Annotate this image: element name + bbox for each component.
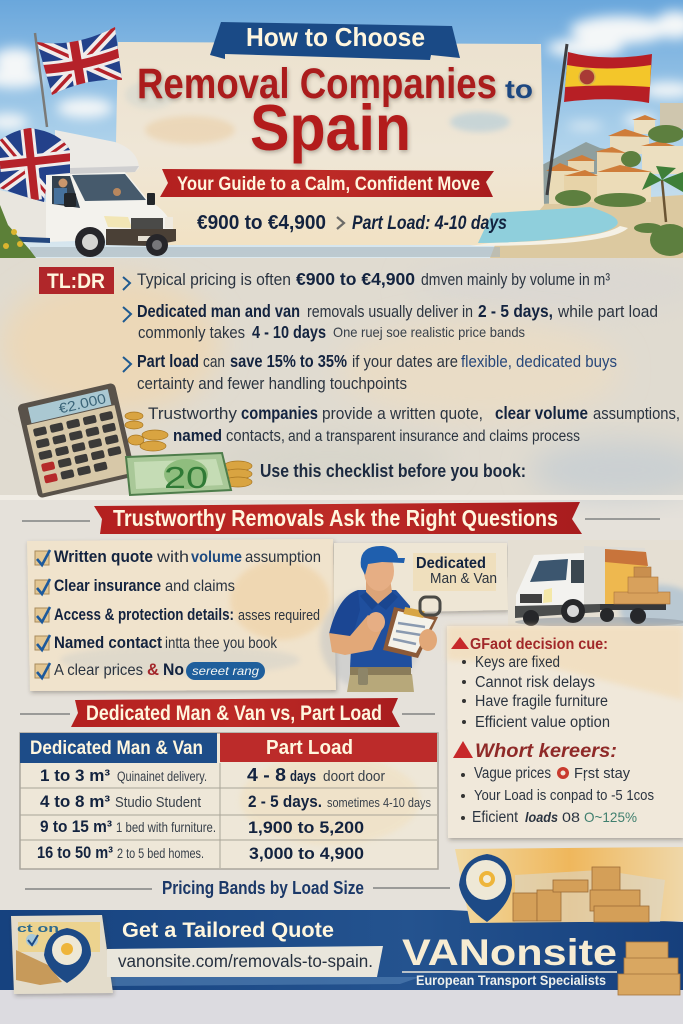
- table row 1: [40, 765, 385, 785]
- check item: written quote: with: [156, 549, 189, 566]
- panel: tl;dr: [39, 267, 680, 481]
- warning list: Eficient: [472, 809, 519, 826]
- illustration: calculator, coins and banknote: [17, 383, 252, 499]
- table header: dedicated: Dedicated Man & Van: [30, 737, 203, 759]
- table row 3: 9 to 15 m³: [40, 817, 112, 836]
- logo: vanonsite: VANonsite: [402, 932, 617, 973]
- table row 3: 1,900 to 5,200: [248, 818, 364, 837]
- fast decision cue list: Keys are fixed: [475, 654, 560, 671]
- section heading: trustworthy removals: [22, 502, 660, 534]
- main title: to: [505, 74, 533, 104]
- fast decision cue list: [451, 636, 610, 731]
- section heading: dedicated vs part load: Dedicated Man & Van vs, Part Load: [86, 702, 382, 725]
- table row 1: 1 to 3 m³: [40, 766, 110, 785]
- bullet: pricing: dmven mainly by volume in m³: [421, 271, 610, 289]
- bullet: delivery times: commonly takes: [138, 324, 245, 342]
- bullet: delivery times: while part load: [557, 303, 658, 321]
- table row 1: doort door: [323, 769, 385, 785]
- illustration: map pin and boxes: [455, 847, 683, 923]
- bullet: pricing: [123, 269, 610, 290]
- panel: decision cues: [447, 626, 683, 838]
- check item: written quote: volume: [191, 549, 242, 566]
- check item: written quote: Written quote: [54, 548, 153, 566]
- bullet: delivery times: Dedicated man and van: [137, 301, 300, 321]
- table header: dedicated: [20, 733, 217, 763]
- table row 2: Studio Student: [115, 795, 201, 811]
- parchment title panel: [114, 42, 544, 245]
- bullet: part load savings: [123, 351, 617, 393]
- footer band: [0, 910, 683, 990]
- main title: Spain: [250, 91, 411, 164]
- warning list: Vague prices: [474, 765, 551, 782]
- check item: written quote: assumption: [245, 549, 321, 566]
- table row 4: 3,000 to 4,900: [249, 844, 364, 863]
- table row 1: days: [290, 768, 316, 785]
- bullet: trustworthy companies: companies: [241, 403, 318, 423]
- bullet: trustworthy companies: clear volume: [495, 403, 588, 423]
- section heading: dedicated vs part load: [20, 698, 435, 727]
- table header: part load: Part Load: [266, 737, 353, 759]
- illustration: calculator, coins and banknote: €2.000: [57, 390, 108, 416]
- title banner: how to choose: How to Choose: [246, 22, 425, 52]
- bullet: part load savings: can: [203, 353, 225, 371]
- check item: access and protection: Access & protection details:: [54, 606, 234, 624]
- call to action: Get a Tailored Quote: [122, 919, 334, 942]
- fast decision cue list: Cannot risk delays: [475, 674, 595, 691]
- illustration: stacked boxes: [618, 942, 680, 995]
- illustration: removal man with clipboard: [320, 546, 440, 692]
- main title: Removal Companies: [137, 60, 497, 108]
- fast decision cue list: GFaot decision cue:: [470, 636, 608, 653]
- price and time summary: €900 to €4,900: [197, 212, 326, 234]
- check item: clear prices: sereet rang: [192, 664, 259, 678]
- warning list: Your Load is conpad to -5 1cos: [474, 787, 654, 804]
- illustration: calculator, coins and banknote: 20: [164, 460, 208, 495]
- check item: insurance: and claims: [165, 578, 235, 595]
- coast: sea, surf, palm and bushes: [470, 166, 683, 256]
- call to action: [107, 919, 383, 977]
- tl;dr badge: TL:DR: [47, 270, 105, 293]
- bullet: trustworthy companies: named: [173, 426, 222, 445]
- table row 2: 4 to 8 m³: [40, 792, 110, 811]
- heading: pricing bands: Pricing Bands by Load Size: [162, 877, 364, 898]
- warning list: Fŗst stay: [574, 766, 631, 782]
- subtitle red banner: [160, 169, 494, 197]
- bullet: part load savings: flexible, dedicated buys: [461, 353, 617, 371]
- bullet: trustworthy companies: Trustworthy: [148, 404, 237, 423]
- logo: vanonsite: European Transport Specialists: [416, 972, 606, 988]
- icon: uk flag on pole: [34, 27, 122, 128]
- warning list: 08: [562, 809, 580, 825]
- subtitle red banner: Your Guide to a Calm, Confident Move: [177, 173, 480, 195]
- check item: written quote: [35, 548, 321, 566]
- panel: dedicated man and van callout: Dedicated: [416, 555, 486, 572]
- check item: clear prices: No: [163, 661, 184, 679]
- check item: named contact: intta thee you book: [165, 635, 278, 652]
- illustration: map card with pin: [11, 915, 113, 994]
- check item: clear prices: &: [147, 661, 159, 679]
- section heading: trustworthy removals: Trustworthy Removals Ask the Right Questions: [113, 505, 558, 531]
- fast decision cue list: Efficient value option: [475, 714, 610, 731]
- bullet: delivery times: removals usually deliver in: [307, 303, 473, 321]
- table row 4: [37, 843, 364, 863]
- panel: dedicated man and van callout: [334, 543, 508, 640]
- illustration: delivery truck with boxes: [515, 546, 683, 627]
- bullet: delivery times: 4 - 10 days: [252, 322, 326, 342]
- bullet: trustworthy companies: contacts,: [226, 427, 285, 445]
- warning list: loads: [525, 809, 558, 825]
- bullet: trustworthy companies: provide a written quote,: [322, 405, 483, 423]
- price and time summary: Part Load: 4-10 days: [352, 213, 507, 234]
- bullet: part load savings: Part load: [137, 351, 199, 371]
- bullet: part load savings: if your dates are: [352, 353, 458, 371]
- table row 1: 4 - 8: [247, 765, 286, 785]
- bullet: delivery times: One ruej soe realistic price bands: [333, 324, 525, 340]
- table row 4: 2 to 5 bed homes.: [117, 846, 204, 861]
- check item: insurance: [35, 577, 235, 595]
- title banner: how to choose: [210, 22, 460, 60]
- fast decision cue list: Have fragile furniture: [475, 693, 608, 710]
- main title: [137, 60, 533, 164]
- panel: checklist: [27, 539, 336, 691]
- call to action: vanonsite.com/removals-to-spain.: [118, 951, 373, 971]
- table row 3: [40, 817, 364, 837]
- table row 2: [40, 792, 431, 811]
- bullet: pricing: €900 to €4,900: [296, 269, 415, 289]
- illustration: map card with pin: ct on: [17, 923, 59, 935]
- warning list: O~125%: [584, 809, 637, 825]
- illustration: white removal van with union flag: [0, 120, 500, 258]
- warning list: Whort kereers:: [475, 741, 617, 762]
- check item: insurance: Clear insurance: [54, 577, 161, 595]
- checklist lead-in: Use this checklist before you book:: [260, 460, 526, 481]
- icon: spanish flag on pole: [547, 44, 652, 195]
- panel: dedicated man and van callout: Man & Van: [430, 570, 497, 587]
- spanish town illustration: [513, 103, 683, 207]
- warning list: [453, 741, 654, 826]
- table row 1: Quinainet delivery.: [117, 769, 207, 784]
- logo: vanonsite: [402, 932, 617, 988]
- bullet: trustworthy companies: and a transparent insurance and claims process: [288, 428, 580, 445]
- bullet: trustworthy companies: [148, 403, 680, 445]
- table row 2: sometimes 4-10 days: [327, 795, 431, 810]
- header scene: sky, clouds, mountain: [0, 0, 683, 258]
- table: dedicated vs part load: [20, 733, 438, 869]
- table row 2: 2 - 5 days.: [248, 792, 322, 811]
- check item: access and protection: asses required: [238, 607, 320, 624]
- bullet: delivery times: [123, 301, 658, 342]
- table header: part load: [220, 733, 437, 762]
- bullet: delivery times: 2 - 5 days,: [478, 301, 553, 321]
- table row 3: 1 bed with furniture.: [116, 819, 216, 835]
- price and time summary: [197, 212, 507, 234]
- bullet: part load savings: certainty and fewer handling touchpoints: [137, 375, 407, 393]
- check item: named contact: [35, 634, 278, 652]
- check item: clear prices: [35, 661, 265, 680]
- panel: truck background: [508, 540, 683, 635]
- table row 4: 16 to 50 m³: [37, 843, 113, 862]
- check item: clear prices: A clear prices: [54, 662, 143, 679]
- bullet: part load savings: save 15% to 35%: [230, 351, 347, 371]
- bullet: pricing: Typical pricing is often: [137, 270, 291, 289]
- check item: named contact: Named contact: [54, 634, 162, 652]
